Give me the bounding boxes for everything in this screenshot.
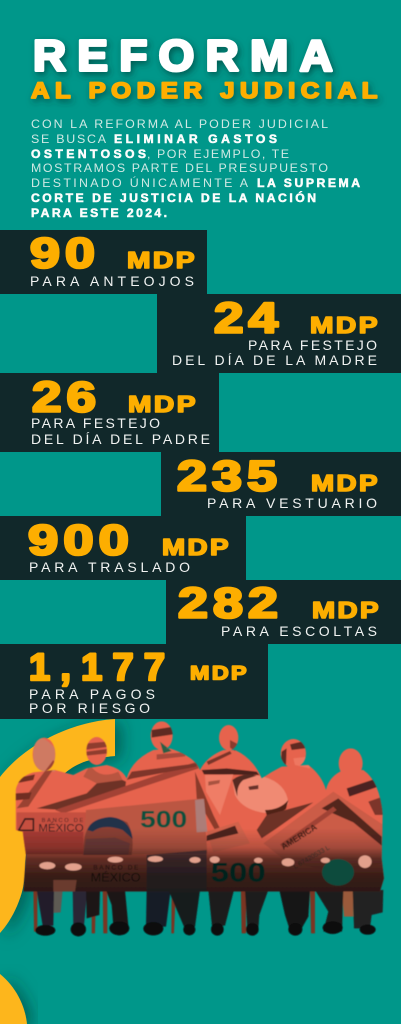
dollar bills texture [13,727,387,893]
panel: 235 MDP vestuario [161,452,401,516]
tilted dollar [263,792,383,872]
title [31,32,383,103]
panel: 1,177 MDP pagos por riesgo: MDP [190,662,249,684]
intro text block: OSTENTOSOS [31,147,146,161]
dollar bills texture: AMERICA [279,821,319,852]
panel: 900 MDP traslado: PARA TRASLADO [29,559,190,575]
panel: 26 MDP dia del padre [0,373,219,452]
dollar bills texture: MÉXICO [38,821,84,834]
lincoln portrait [232,775,288,813]
dollar bills texture: L 67420533 L [292,844,331,871]
panel: 282 MDP escoltas: MDP [312,597,381,623]
dollar bills texture: BANCO DE [93,864,138,871]
intro text block [31,117,360,220]
intro text block: ELIMINAR GASTOS [114,132,277,146]
panel: 90 MDP anteojos: PARA ANTEOJOS [30,273,194,289]
panel: 26 MDP dia del padre: DEL DÍA DEL PADRE [31,431,210,447]
peso note [16,812,86,842]
panel: 1,177 MDP pagos por riesgo: PARA PAGOS [29,686,155,702]
panel: 282 MDP escoltas: 282 [178,580,283,628]
dollar bills texture: MÉXICO [91,870,141,885]
panel: 235 MDP vestuario: 235 [177,454,282,500]
hands [39,855,372,871]
bank logo [19,819,33,830]
panel: 90 MDP anteojos [0,230,207,294]
panel: 24 MDP dia de la madre: DEL DÍA DE LA MADRE [172,352,377,368]
panel: 26 MDP dia del padre: PARA FESTEJO [31,415,160,431]
dark lower fade [13,828,387,893]
illustration: seated people filled with banknotes [13,718,387,936]
dollar bills texture: BANCO DE [42,818,84,824]
panel: 26 MDP dia del padre: MDP [128,391,198,417]
dollar bills texture: 500 [211,858,266,888]
panel: 24 MDP dia de la madre: 24 [214,296,283,342]
panel: 1,177 MDP pagos por riesgo: 1,177 [29,647,165,689]
panel: 900 MDP traslado: MDP [162,534,231,560]
intro text block: SE BUSCA [31,132,107,146]
intro text block: PARA ESTE 2024. [31,206,167,220]
intro text block: CON LA REFORMA AL PODER JUDICIAL [31,117,328,131]
panel: 24 MDP dia de la madre [157,294,401,373]
decorative yellow arc [0,719,115,933]
panel: 1,177 MDP pagos por riesgo: POR RIESGO [29,700,150,716]
panel: 900 MDP traslado [0,516,246,580]
intro text block: CORTE DE JUSTICIA DE LA NACIÓN [31,190,316,205]
subheading: AL PODER JUDICIAL: AL PODER JUDICIAL [31,78,383,103]
shoes [35,921,376,936]
panel: 24 MDP dia de la madre: MDP [310,312,380,338]
panel: 24 MDP dia de la madre: PARA FESTEJO [248,337,377,353]
decorative yellow corner circle [0,974,27,1024]
panel: 235 MDP vestuario: MDP [311,470,380,496]
intro text block: LA SUPREMA [257,176,360,190]
panel: 235 MDP vestuario: PARA VESTUARIO [207,495,377,511]
panel: 282 MDP escoltas [166,580,401,644]
intro text block: DESTINADO ÚNICAMENTE A [31,175,249,190]
panel: 900 MDP traslado: 900 [28,518,134,564]
panel: 1,177 MDP pagos por riesgo [0,644,268,719]
silhouette with banknote collage [13,718,387,893]
intro text block: MOSTRAMOS PARTE DEL PRESUPUESTO [31,161,328,175]
heading: REFORMA: REFORMA [33,32,344,80]
panel: 282 MDP escoltas: PARA ESCOLTAS [221,623,377,639]
dollar bills texture: 500 [140,806,187,833]
panel: 26 MDP dia del padre: 26 [32,374,101,422]
panel: 90 MDP anteojos: MDP [127,247,197,273]
chair and leg shapes [33,882,383,933]
intro text block: , POR EJEMPLO, TE [147,147,289,161]
panel: 90 MDP anteojos: 90 [30,230,100,278]
